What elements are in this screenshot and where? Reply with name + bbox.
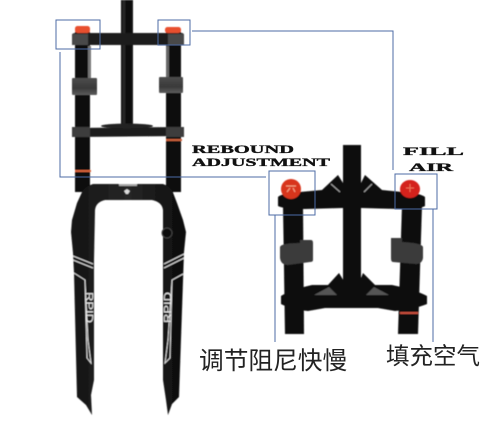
orange ring detail	[400, 312, 418, 314]
orange rings	[75, 170, 91, 172]
lower crown	[72, 127, 184, 137]
label: fill air: AIR	[409, 160, 454, 174]
connector: air label	[432, 209, 434, 342]
photo: full suspension fork	[71, 0, 186, 415]
upper crown detail	[278, 175, 425, 209]
box: left fork air cap	[158, 20, 190, 45]
connector: air cap to detail	[192, 31, 393, 170]
label: Chinese air: 填充空气	[386, 343, 480, 369]
label: rebound adjustment: REBOUND	[192, 144, 294, 156]
label: Chinese rebound: 调节阻尼快慢	[199, 347, 347, 375]
right leg logo: RPID	[163, 292, 174, 323]
right stanchion	[166, 32, 181, 192]
box: detail air cap	[395, 174, 437, 209]
fork lower arch and legs	[71, 184, 186, 415]
upper crown	[72, 33, 184, 45]
connector: rebound label	[274, 215, 276, 342]
label: fill air	[403, 144, 464, 174]
red cap: rebound	[281, 179, 301, 199]
left leg detail	[283, 205, 304, 334]
steerer detail	[343, 145, 361, 300]
callout lines and boxes	[56, 20, 437, 342]
box: left fork rebound cap	[56, 20, 100, 49]
right red cap	[165, 27, 181, 33]
left leg logo: RPID	[83, 292, 94, 323]
right leg bolt	[162, 228, 172, 238]
left sleeve detail	[280, 240, 313, 265]
label: rebound adjustment	[192, 144, 331, 169]
right sleeve	[159, 77, 183, 93]
left red cap	[75, 26, 90, 33]
connector: rebound cap to detail	[60, 52, 266, 177]
label: rebound adjustment: ADJUSTMENT	[192, 157, 331, 169]
label: fill air: FILL	[403, 144, 464, 158]
right sleeve detail	[391, 238, 423, 264]
box: detail rebound cap	[269, 171, 315, 215]
crown badge	[119, 184, 137, 186]
left stanchion	[75, 32, 90, 192]
white graphics on legs	[73, 256, 93, 363]
left sleeve	[72, 78, 97, 95]
right leg detail	[398, 205, 422, 334]
steerer tube	[121, 0, 133, 130]
lower crown detail	[281, 273, 427, 311]
photo: crown detail	[278, 145, 427, 334]
red cap: air	[400, 180, 420, 198]
